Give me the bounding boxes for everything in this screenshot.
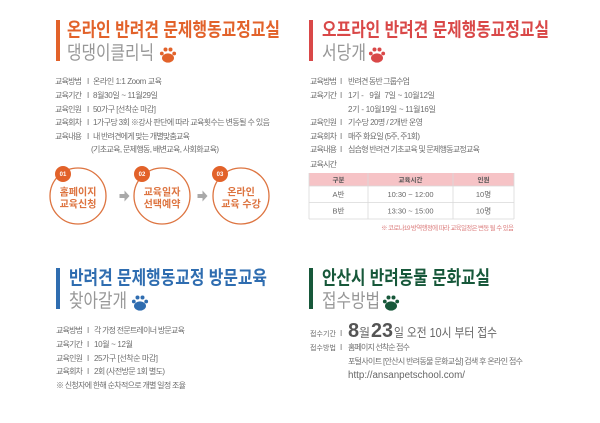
- details: offline class: [310, 76, 480, 169]
- registration period: 8: [348, 320, 359, 342]
- schedule table: 인원: [478, 175, 489, 184]
- heading accent bar: offline: [309, 20, 313, 61]
- step 3: [212, 166, 269, 224]
- registration method: 접수방법: [310, 343, 336, 352]
- icon: red paw: [369, 48, 385, 63]
- details: visit class: ※ 신청자에 한해 순차적으로 개별 일정 조율: [56, 380, 186, 390]
- subtitle: online provider: 댕댕이클리닉: [67, 42, 154, 64]
- details: visit class: 각 가정 전문트레이너 방문교육: [94, 325, 185, 335]
- details: offline class: 반려견 동반 그룹수업: [348, 76, 410, 86]
- details: visit class: I: [87, 367, 89, 376]
- registration method: I: [340, 343, 342, 352]
- heading accent bar: registration: [309, 268, 313, 309]
- arrow: step 2 to 3: [198, 190, 208, 202]
- step 1: 홈페이지: [60, 186, 96, 198]
- details: online class: I: [87, 77, 89, 86]
- details: visit class: [56, 325, 186, 390]
- schedule table: A반: [333, 190, 345, 199]
- heading accent bar: online: [56, 20, 60, 61]
- schedule table: 교육시간: [399, 175, 422, 184]
- registration period: 일 오전 10시 부터 접수: [394, 326, 497, 340]
- details: offline class: 교육인원: [310, 117, 337, 127]
- schedule table: 구분: [333, 176, 344, 184]
- details: online class: 교육인원: [55, 104, 82, 114]
- schedule table: 13:30 ~ 15:00: [387, 206, 434, 216]
- details: offline class: 1기 - 9월 7일 ~ 10월12일: [348, 90, 435, 100]
- details: offline class: 교육내용: [310, 145, 337, 154]
- registration method: [310, 342, 523, 381]
- details: offline class: 2기 - 10월19일 ~ 11월16일: [348, 104, 436, 114]
- details: offline class: 교육시간: [310, 159, 338, 169]
- subtitle: visit provider: 찾아갈개: [69, 290, 127, 312]
- details: online class: 내 반려견에게 맞는 개별맞춤교육: [93, 131, 190, 141]
- step 3: 03: [217, 172, 224, 178]
- title: visit class: 반려견 문제행동교정 방문교육: [69, 267, 267, 289]
- step 1: 교육신청: [60, 198, 96, 210]
- details: online class: I: [87, 105, 89, 114]
- step 2: 교육일자: [144, 186, 180, 198]
- registration method: 포털사이트 [안산시 반려동물 문화교실] 검색 후 온라인 접수: [348, 356, 523, 366]
- icon: orange paw: [160, 48, 176, 63]
- details: offline class: I: [340, 77, 342, 86]
- icon: green paw: [383, 296, 399, 311]
- registration period: 접수기간: [310, 329, 337, 338]
- registration method: 홈페이지 선착순 접수: [348, 342, 410, 352]
- registration period: [310, 320, 497, 342]
- details: offline class: 교육기간: [310, 90, 338, 100]
- icon: blue paw: [132, 296, 148, 311]
- title: Ansan pet culture class: 안산시 반려동물 문화교실: [322, 267, 490, 289]
- details: online class: 8월30일 ~ 11월29일: [93, 90, 158, 100]
- details: online class: I: [87, 132, 89, 141]
- details: offline class: 기수당 20명 / 2개반 운영: [348, 117, 423, 127]
- details: online class: 교육방법: [55, 76, 82, 86]
- registration period: I: [340, 329, 342, 338]
- details: online class: [55, 76, 270, 154]
- details: online class: 1가구당 3회 ※강사 판단에 따라 교육횟수는 변동될 수 있음: [93, 117, 270, 127]
- panel: registration: [309, 267, 523, 381]
- step 2: 선택예약: [144, 198, 180, 210]
- schedule table: 10명: [476, 206, 491, 216]
- subtitle: how to apply: 접수방법: [322, 290, 380, 312]
- details: offline class: I: [340, 118, 342, 127]
- step 1: 01: [60, 172, 67, 178]
- details: online class: 50가구 [선착순 마감]: [93, 104, 156, 114]
- panel: home visit class: [56, 267, 267, 390]
- details: online class: (기초교육, 문제행동, 배변교육, 사회화교육): [91, 144, 219, 154]
- details: online class: I: [87, 91, 89, 100]
- title: offline class: 오프라인 반려견 문제행동교정교실: [322, 19, 549, 41]
- details: visit class: 교육회차: [56, 367, 84, 376]
- details: online class: 교육기간: [55, 90, 83, 100]
- details: visit class: I: [87, 354, 89, 363]
- schedule table: 10명: [476, 189, 491, 199]
- note: schedule may change: ※ 코로나19 방역행정에 따라 교육일정은 변동 될 수 있음: [381, 223, 514, 232]
- panel: online class: [50, 19, 280, 224]
- details: visit class: 2회 (사전방문 1회 별도): [94, 366, 165, 376]
- details: visit class: I: [87, 326, 89, 335]
- details: visit class: 교육기간: [56, 339, 84, 349]
- details: online class: I: [87, 118, 89, 127]
- step 3: 교육 수강: [221, 198, 261, 210]
- details: online class: 교육회차: [55, 118, 83, 127]
- step 2: [134, 166, 190, 224]
- details: online class: 온라인 1:1 Zoom 교육: [93, 76, 162, 86]
- title: online class: 온라인 반려견 문제행동교정교실: [67, 19, 280, 41]
- registration period: 23: [371, 320, 393, 342]
- details: offline class: I: [340, 132, 342, 141]
- schedule table: 10:30 ~ 12:00: [387, 190, 434, 199]
- details: visit class: 25가구 [선착순 마감]: [94, 353, 158, 363]
- panel: offline class: [309, 19, 549, 232]
- details: visit class: 10월 ~ 12월: [94, 339, 133, 349]
- schedule table: [309, 173, 514, 219]
- details: visit class: I: [87, 340, 89, 349]
- details: visit class: 교육방법: [56, 325, 83, 335]
- heading accent bar: visit: [56, 268, 60, 309]
- step 2: 02: [139, 172, 146, 178]
- details: offline class: 매주 화요일 (5주, 주1회): [348, 132, 420, 141]
- step 1: [50, 166, 106, 224]
- details: online class: 교육내용: [55, 132, 82, 141]
- details: offline class: I: [340, 91, 342, 100]
- registration period: 월: [359, 326, 370, 340]
- details: offline class: 교육방법: [310, 76, 337, 86]
- details: visit class: 교육인원: [56, 353, 83, 363]
- details: offline class: 교육회차: [310, 132, 338, 141]
- arrow: step 1 to 2: [120, 190, 130, 202]
- details: offline class: I: [340, 145, 342, 154]
- subtitle: offline provider: 서당개: [322, 42, 366, 64]
- details: offline class: 심습형 반려견 기초교육 및 문제행동교정교육: [348, 144, 480, 154]
- registration method: http://ansanpetschool.com/: [348, 370, 465, 381]
- step 3: 온라인: [227, 186, 255, 198]
- schedule table: B반: [333, 206, 345, 216]
